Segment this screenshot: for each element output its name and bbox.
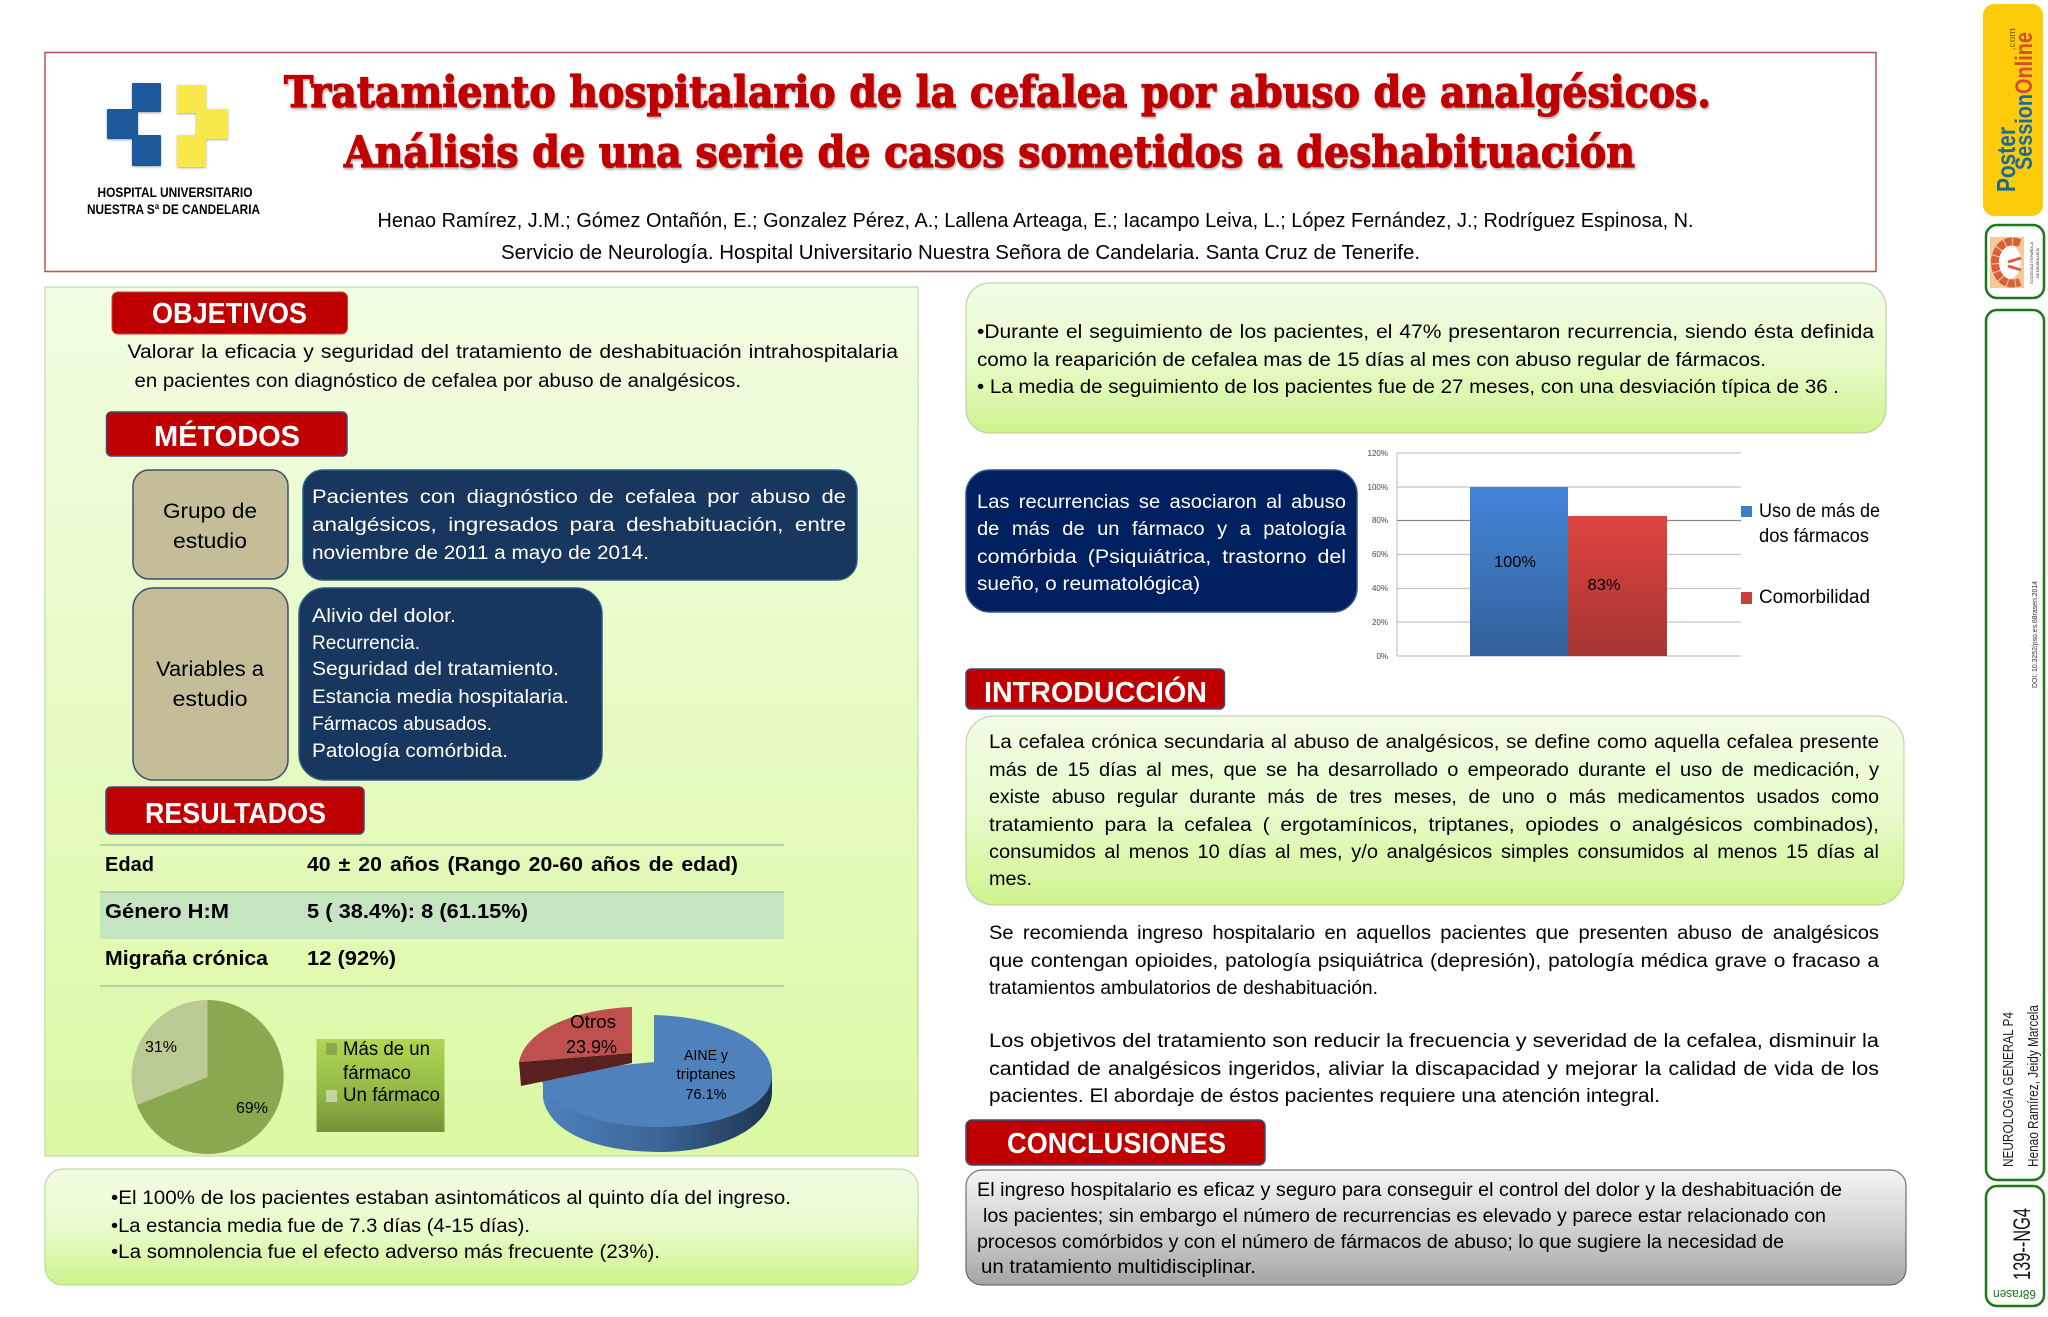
legend: fármacos: fármaco [343,1063,411,1084]
box: pacientes: analgésicos, ingresados para deshabituación, entre [312,515,846,536]
legend: recurrencias [1741,501,1880,608]
box: pacientes [303,470,857,580]
panel: introducción: más de 15 días al mes, que se ha desarrollado o empeorado durante el uso de medicación, y [989,760,1880,781]
icon: hospital logo [108,84,227,166]
bar chart: recurrencias: 100% [1368,483,1388,492]
bar chart: recurrencias: 83% [1588,577,1620,594]
panel: introducción: tratamiento para la cefalea ( ergotamínicos, triptanes, opiodes o analgésicos combinados), [989,815,1879,836]
heading: objetivos: OBJETIVOS [152,298,307,330]
panel: resultados adicionales: •La estancia media fue de 7.3 días (4-15 días). [111,1216,530,1237]
hospital name: NUESTRA Sª DE CANDELARIA [87,201,260,217]
legend: recurrencias: dos fármacos [1759,526,1869,547]
table: resultados: Género H:M [105,901,229,923]
panel: resultados adicionales: •El 100% de los pacientes estaban asintomáticos al quinto día del ingreso. [111,1188,791,1209]
sidebar: session information: NEUROLOGIA GENERAL P4 [2000,1012,2017,1167]
legend: fármacos: Un fármaco [343,1085,440,1106]
table: resultados: 40 ± 20 años (Rango 20-60 años de edad) [307,854,738,876]
heading: introducción: INTRODUCCIÓN [984,675,1207,709]
box: recurrencias: Las recurrencias se asociaron al abuso [977,492,1346,513]
text: objetivos del tratamiento: pacientes. El abordaje de éstos pacientes requiere una atención integral. [989,1086,1660,1107]
panel: introducción: existe abuso regular durante más de tres meses, de uno o más medicamentos usados como [989,787,1879,808]
sidebar: poster session online logo: Session [2011,94,2038,170]
panel: resultados adicionales [45,1169,918,1285]
panel: seguimiento [966,283,1886,433]
box: variables a estudio: estudio [172,688,248,711]
text: recomendaciones: Se recomienda ingreso hospitalario en aquellos pacientes que presenten abuso de analgésicos [989,923,1879,944]
text: objetivos del tratamiento: Los objetivos del tratamiento son reducir la frecuencia y severidad de la cefalea, disminuir la [989,1031,1879,1052]
text: objetivos: Valorar la eficacia y seguridad del tratamiento de deshabituación intrahospitalaria [128,342,898,363]
legend: recurrencias: Comorbilidad [1759,587,1870,608]
panel: introducción: La cefalea crónica secundaria al abuso de analgésicos, se define como aquella cefalea presente [989,732,1879,753]
box: variables list: Estancia media hospitalaria. [312,687,569,708]
sidebar: society logo: DE NEUROLOGÍA [2035,248,2040,278]
bar chart: recurrencias: 20% [1372,618,1388,627]
legend: recurrencias: Uso de más de [1759,501,1880,522]
box: pacientes: Pacientes con diagnóstico de cefalea por abuso de [312,487,846,508]
box: grupo de estudio: estudio [173,530,247,553]
heading: resultados [106,787,364,834]
3d pie chart: tipos de fármaco: 23.9% [566,1037,617,1057]
box: pacientes: noviembre de 2011 a mayo de 2014. [312,543,649,564]
box: recurrencias: comórbida (Psiquiátrica, trastorno del [977,547,1346,568]
hospital name [87,184,260,217]
authors: Henao Ramírez, J.M.; Gómez Ontañón, E.; Gonzalez Pérez, A.; Lallena Arteaga, E.; Iacampo Leiva, L.; López Fernández, J.; Rodríguez Espinosa, N. [378,210,1694,232]
panel: resultados adicionales: •La somnolencia fue el efecto adverso más frecuente (23%). [111,1242,660,1263]
legend: fármacos [316,1039,444,1132]
box: grupo de estudio: Grupo de [163,500,257,523]
panel: introducción [966,716,1904,905]
affiliation: Servicio de Neurología. Hospital Universitario Nuestra Señora de Candelaria. Santa Cruz de Tenerife. [501,242,1420,264]
text: recomendaciones [989,923,1879,999]
title: Tratamiento hospitalario de la cefalea por abuso de analgésicos. [284,68,1711,118]
sidebar: poster code [1986,1186,2044,1306]
sidebar: poster code: 68rasen [1993,1287,2036,1302]
panel: seguimiento: • La media de seguimiento de los pacientes fue de 27 meses, con una desviación típica de 36 . [977,377,1839,398]
bar chart: recurrencias: 60% [1372,550,1388,559]
panel: introducción: consumidos al menos 10 días al mes, y/o analgésicos simples consumidos al menos 15 días al [989,842,1879,863]
text: objetivos: en pacientes con diagnóstico de cefalea por abuso de analgésicos. [134,371,741,392]
text: objetivos del tratamiento [989,1031,1879,1107]
sidebar: poster session online logo: Online [2011,32,2038,94]
box: variables a estudio: Variables a [156,658,264,681]
pie chart: fármacos [132,1000,284,1154]
heading: introducción [966,669,1224,709]
bar chart: recurrencias: 120% [1368,449,1388,458]
panel: conclusiones: los pacientes; sin embargo el número de recurrencias es elevado y parece estar relacionado con [983,1206,1826,1227]
bar chart: recurrencias: 100% [1494,554,1536,571]
3d pie chart: tipos de fármaco: Otros [570,1012,616,1032]
heading: objetivos [112,292,348,334]
table: resultados: 12 (92%) [307,948,396,970]
sidebar: poster code: 139--NG4 [2009,1208,2036,1280]
heading: métodos [106,412,347,456]
table: resultados: Migraña crónica [105,948,269,970]
sidebar: session information [1986,310,2044,1180]
panel: conclusiones: El ingreso hospitalario es eficaz y seguro para conseguir el control del dolor y la deshabituación de [977,1180,1842,1201]
sidebar: session information: DOI: 10.3252/pso.es.68rasen.2014 [2032,581,2039,688]
panel: conclusiones [966,1170,1906,1285]
sidebar: poster session online logo [1983,4,2043,216]
bar chart: recurrencias: 0% [1376,652,1388,661]
box: variables list: Patología comórbida. [312,741,508,762]
heading: resultados: RESULTADOS [145,798,326,830]
panel: seguimiento: •Durante el seguimiento de los pacientes, el 47% presentaron recurrencia, siendo ésta definida [977,322,1874,343]
panel: introducción: mes. [989,869,1032,890]
bar chart: recurrencias: 40% [1372,584,1388,593]
heading: métodos: MÉTODOS [154,419,300,453]
box: variables list: Recurrencia. [312,633,420,654]
panel: conclusiones: procesos comórbidos y con el número de fármacos de abuso; lo que sugiere la necesidad de [977,1232,1784,1253]
heading: conclusiones: CONCLUSIONES [1007,1128,1226,1160]
hospital name: HOSPITAL UNIVERSITARIO [98,184,253,200]
box: grupo de estudio [133,470,288,579]
panel: left column [45,287,918,1156]
text: recomendaciones: tratamientos ambulatorios de deshabituación. [989,978,1378,999]
sidebar: society logo [1986,225,2044,298]
text: recomendaciones: que contengan opioides, patología psiquiátrica (depresión), patología médica grave o fracaso a [989,951,1879,972]
title: Análisis de una serie de casos sometidos a deshabituación [343,128,1635,178]
panel: seguimiento: como la reaparición de cefalea mas de 15 días al mes con abuso regular de fármacos. [977,350,1766,371]
table: resultados: 5 ( 38.4%): 8 (61.15%) [307,901,528,923]
3d pie chart: tipos de fármaco: AINE y [684,1047,728,1064]
pie chart: fármacos: 31% [145,1039,177,1056]
legend: fármacos: Más de un [343,1039,430,1060]
box: variables list: Seguridad del tratamiento. [312,659,559,680]
panel: header [45,52,1876,272]
sidebar: society logo: SOCIEDAD ESPAÑOLA [2029,242,2034,284]
text: objetivos [128,342,898,392]
box: recurrencias: de más de un fármaco y a patología [977,519,1346,540]
bar chart: recurrencias: 80% [1372,516,1388,525]
box: recurrencias [966,470,1357,612]
title [284,68,1711,178]
bar chart: recurrencias [1368,449,1880,661]
text: objetivos del tratamiento: cantidad de analgésicos ingeridos, aliviar la discapacidad y mejorar la calidad de vida de los [989,1059,1879,1080]
3d pie chart: tipos de fármaco [519,1007,772,1152]
pie chart: fármacos: 69% [236,1100,268,1117]
box: variables list: Alivio del dolor. [312,606,456,627]
sidebar: poster session online logo: Poster [1991,127,2021,192]
panel: conclusiones: un tratamiento multidisciplinar. [981,1257,1256,1278]
box: variables list: Fármacos abusados. [312,714,492,735]
3d pie chart: tipos de fármaco: triptanes [676,1066,736,1083]
box: recurrencias: sueño, o reumatológica) [977,574,1200,595]
box: variables list [299,588,602,780]
3d pie chart: tipos de fármaco: 76.1% [686,1086,726,1103]
table: resultados: Edad [105,854,154,876]
heading: conclusiones [966,1120,1265,1165]
table: resultados [100,845,784,986]
sidebar: session information: Henao Ramírez, Jeidy Marcela [2025,1004,2042,1167]
box: variables a estudio [133,588,288,780]
sidebar: poster session online logo: .com [2006,28,2018,50]
